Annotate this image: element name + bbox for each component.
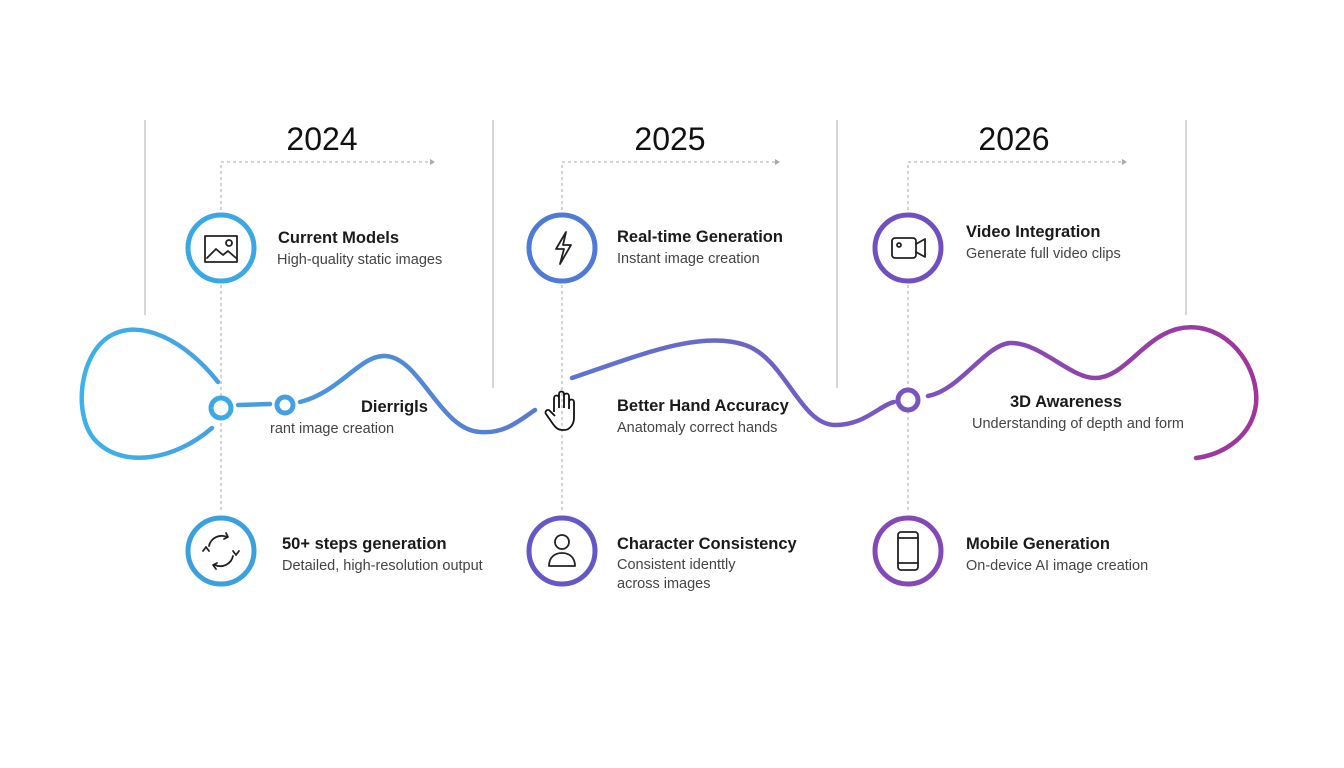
- text: Consistent identtly: [617, 557, 736, 573]
- text: Detailed, high-resolution output: [282, 558, 483, 574]
- text: Character Consistency: [617, 535, 798, 553]
- text: Understanding of depth and form: [972, 416, 1184, 432]
- text: Anatomaly correct hands: [617, 420, 777, 436]
- text: 3D Awareness: [1010, 393, 1122, 411]
- text blocks: Current Models: [278, 229, 399, 247]
- wave timeline: [82, 327, 1256, 458]
- text: Dierrigls: [361, 398, 428, 416]
- text: Better Hand Accuracy: [617, 397, 790, 415]
- text: High-quality static images: [277, 252, 442, 268]
- years: 2025: [634, 121, 706, 157]
- text: Mobile Generation: [966, 535, 1110, 553]
- text: Video Integration: [966, 223, 1100, 241]
- text: 50+ steps generation: [282, 535, 447, 553]
- years: [286, 121, 1050, 157]
- text: Real-time Generation: [617, 228, 783, 246]
- text: On-device AI image creation: [966, 558, 1148, 574]
- text: across images: [617, 576, 710, 592]
- icon: hand: [546, 392, 574, 430]
- icon circles: [188, 215, 941, 584]
- years: 2026: [978, 121, 1050, 157]
- text: Instant image creation: [617, 251, 760, 267]
- text: Generate full video clips: [966, 246, 1121, 262]
- text: rant image creation: [270, 421, 394, 437]
- years: 2024: [286, 121, 358, 157]
